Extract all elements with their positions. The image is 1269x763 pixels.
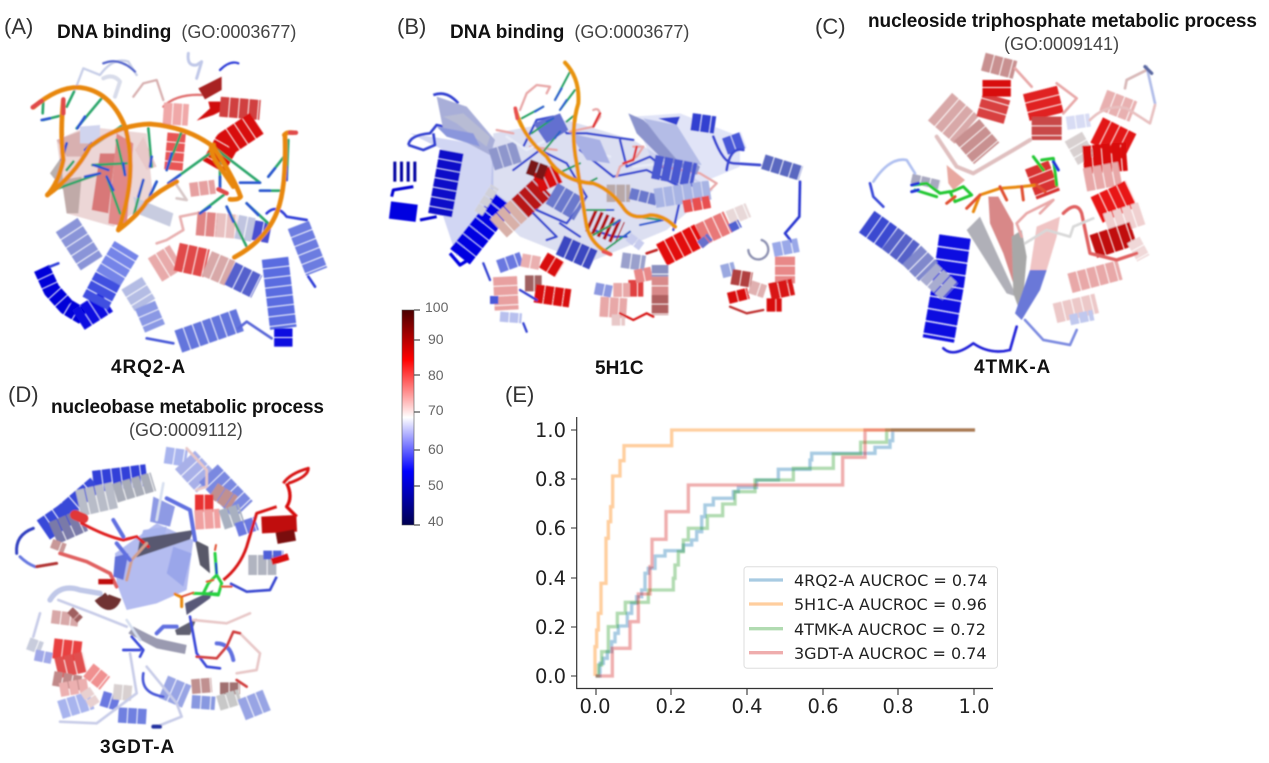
y axis tick labels: 0.0 bbox=[535, 665, 566, 688]
panel C GO term: (GO:0009141) bbox=[1004, 34, 1119, 54]
colour bar: 50 bbox=[428, 477, 444, 493]
left dark blue domain bbox=[390, 94, 505, 265]
curve 5H1C-A bbox=[595, 430, 975, 676]
ligand sticks bbox=[175, 545, 232, 607]
ligand sticks bbox=[912, 157, 1058, 212]
y axis tick labels: 0.6 bbox=[535, 517, 566, 540]
ROC axes bbox=[571, 417, 993, 695]
colour bar: 40 bbox=[428, 513, 444, 529]
legend: 4TMK-A AUCROC = 0.72 bbox=[794, 620, 986, 639]
lower left domain bbox=[490, 258, 570, 318]
upper left helices bbox=[478, 152, 518, 213]
blue lower helix bbox=[938, 237, 955, 340]
panel C title: nucleoside triphosphate metabolic process bbox=[868, 11, 1257, 32]
y axis tick labels: 0.4 bbox=[535, 567, 566, 590]
left lower coils bbox=[28, 610, 105, 710]
colour bar: 70 bbox=[428, 402, 444, 418]
DNA base pairs bbox=[42, 92, 288, 247]
panel C: protein 4TMK-A structure bbox=[867, 62, 1155, 352]
legend: 3GDT-A AUCROC = 0.74 bbox=[794, 644, 987, 663]
central beta sheet bbox=[50, 125, 173, 227]
colour bar bbox=[402, 299, 449, 529]
x axis tick labels: 0.6 bbox=[807, 695, 839, 718]
central beta strands bbox=[533, 113, 610, 163]
blue-grey upper-left helix bbox=[867, 178, 950, 292]
panel D caption: 3GDT-A bbox=[100, 737, 175, 758]
dark red strands and red helices bbox=[197, 77, 227, 121]
thin central loops and chains bbox=[497, 85, 717, 240]
panel C caption: 4TMK-A bbox=[974, 357, 1051, 378]
central beta barrel bbox=[113, 497, 213, 654]
x axis tick labels: 0.0 bbox=[579, 695, 611, 718]
thin chains bbox=[937, 67, 1155, 345]
central pink helices bbox=[155, 223, 270, 287]
y axis tick labels: 0.2 bbox=[535, 616, 566, 639]
panel A caption: 4RQ2-A bbox=[111, 357, 186, 378]
central pale underlay bbox=[410, 113, 740, 263]
blue lower helices bbox=[42, 225, 317, 347]
lower thin chains bbox=[483, 240, 768, 332]
curve 3GDT-A bbox=[596, 430, 975, 676]
thin chains bbox=[33, 448, 260, 727]
DNA strand tips bbox=[515, 108, 611, 254]
lower middle domain bbox=[595, 260, 660, 320]
upper right red hairpin bbox=[223, 468, 308, 592]
beta sheet and arrows bbox=[947, 165, 1060, 320]
lower right domain bbox=[722, 245, 798, 305]
colour bar: 60 bbox=[428, 441, 444, 457]
red helix bbox=[498, 167, 558, 228]
panel D GO term: (GO:0009112) bbox=[129, 420, 243, 440]
colour bar: 100 bbox=[425, 299, 449, 315]
DNA base pairs bbox=[522, 72, 663, 250]
right red helices bbox=[1073, 100, 1143, 258]
DNA orange backbones bbox=[33, 87, 293, 257]
panel A: protein 4RQ2-A structure bbox=[33, 53, 317, 347]
x axis tick labels: 1.0 bbox=[958, 695, 990, 718]
panel E label: (E) bbox=[505, 382, 534, 407]
upper left grey-blue sheet bbox=[437, 97, 495, 155]
colour bar: 80 bbox=[428, 367, 444, 383]
right blue helices bbox=[653, 122, 801, 198]
y axis tick labels bbox=[535, 419, 566, 688]
blue thin chains bbox=[50, 180, 315, 343]
pink upper helices bbox=[163, 113, 215, 190]
legend bbox=[744, 567, 998, 668]
legend: 5H1C-A AUCROC = 0.96 bbox=[794, 595, 987, 614]
y axis tick labels: 0.8 bbox=[535, 468, 566, 491]
upper left red loop bbox=[17, 515, 148, 587]
x axis tick labels: 0.4 bbox=[731, 695, 763, 718]
upper left helices bbox=[43, 475, 153, 548]
panel A label: (A) bbox=[4, 14, 33, 39]
panel D label: (D) bbox=[8, 382, 39, 407]
red coil near centre bbox=[98, 582, 115, 603]
curve 4TMK-A bbox=[596, 430, 975, 676]
central helices bbox=[552, 193, 657, 260]
long red helix bbox=[662, 202, 748, 255]
panel B: protein 5H1C structure bbox=[390, 63, 801, 332]
bottom left helix bbox=[102, 692, 147, 717]
right blue sheet bbox=[628, 113, 702, 175]
lower right pink helix bbox=[1055, 270, 1120, 320]
bottom right helices bbox=[163, 685, 267, 710]
x axis tick labels: 0.8 bbox=[882, 695, 914, 718]
x axis tick labels bbox=[579, 695, 990, 718]
panel D title: nucleobase metabolic process bbox=[51, 397, 324, 418]
panel D: protein 3GDT-A structure bbox=[17, 448, 308, 727]
upper right helices bbox=[165, 455, 283, 565]
panel E: ROC chart bbox=[535, 417, 998, 718]
thin upper loops bbox=[75, 53, 238, 107]
legend: 4RQ2-A AUCROC = 0.74 bbox=[794, 571, 987, 590]
DNA orange backbones bbox=[516, 63, 675, 254]
panel B label: (B) bbox=[397, 14, 426, 39]
top pink and red helices bbox=[940, 62, 1015, 153]
panel B title: DNA binding (GO:0003677) bbox=[450, 22, 689, 43]
right thin chains bbox=[647, 137, 800, 253]
blue thin chains bbox=[870, 160, 1017, 352]
y axis tick labels: 1.0 bbox=[535, 419, 566, 442]
x axis tick labels: 0.2 bbox=[655, 695, 687, 718]
DNA strand tips bbox=[33, 99, 296, 193]
central red helix bbox=[1037, 90, 1090, 195]
panel C label: (C) bbox=[815, 14, 846, 39]
ROC curves bbox=[595, 430, 975, 676]
curve 4RQ2-A bbox=[596, 430, 975, 676]
red helix top right bbox=[213, 107, 260, 167]
panel A title: DNA binding (GO:0003677) bbox=[57, 22, 296, 43]
colour bar: 90 bbox=[428, 331, 444, 347]
panel B caption: 5H1C bbox=[595, 358, 644, 379]
